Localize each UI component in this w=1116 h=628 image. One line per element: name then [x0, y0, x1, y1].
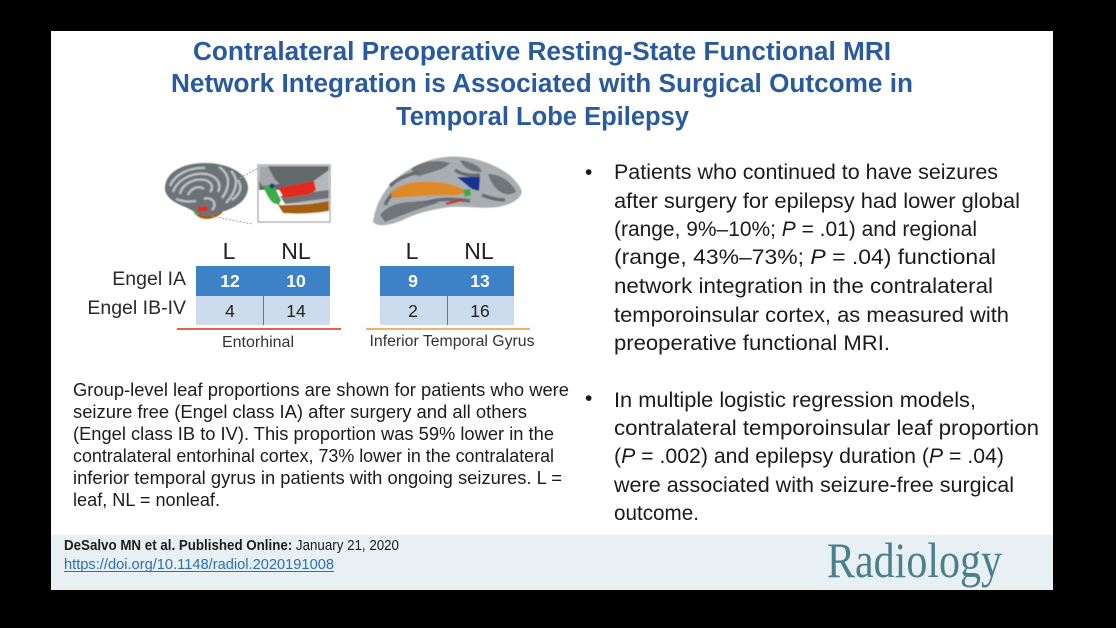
row labels: [87, 268, 186, 319]
rule: [177, 328, 341, 330]
title: Temporal Lobe Epilepsy: [396, 103, 690, 131]
column headers: NL: [464, 238, 494, 264]
logo: Radiology: Radiology: [827, 532, 1002, 588]
text block: first bullet: •: [585, 161, 592, 184]
text block: first bullet: Patients who continued to have seizures: [614, 161, 998, 184]
text block: second bullet: [585, 387, 1039, 525]
column headers: [223, 238, 311, 264]
text block: second bullet: (P = .002) and epilepsy duration (P = .04): [614, 445, 1004, 468]
title: [171, 38, 913, 131]
text block: figure caption: leaf, NL = nonleaf.: [73, 490, 220, 510]
text block: second bullet: were associated with seizure-free surgical: [613, 474, 1014, 497]
cells: [380, 266, 514, 296]
text block: figure caption: inferior temporal gyrus in patients with ongoing seizures. L =: [73, 468, 562, 488]
row labels: Engel IB-IV: [87, 297, 186, 319]
table: inferior temporal gyrus: 2: [408, 301, 418, 321]
text block: first bullet: network integration in the contralateral: [614, 275, 993, 298]
text block: first bullet: temporoinsular cortex, as measured with: [614, 304, 1009, 327]
text block: figure caption: [73, 380, 569, 510]
icon: dotted zoom connectors: [212, 168, 258, 224]
text block: figure caption: Group-level leaf proportions are shown for patients who were: [73, 380, 569, 400]
column headers: NL: [281, 238, 311, 264]
column headers: L: [406, 238, 419, 264]
text block: first bullet: [585, 161, 1020, 355]
doi link: https://doi.org/10.1148/radiol.2020191008: [64, 557, 334, 573]
text block: second bullet: contralateral temporoinsular leaf proportion: [614, 417, 1039, 440]
table: entorhinal: 12: [220, 271, 240, 291]
text block: figure caption: contralateral entorhinal cortex, 73% lower in the contralateral: [73, 446, 554, 466]
text block: first bullet: (range, 43%–73%; P = .04) functional: [614, 246, 996, 269]
text block: figure caption: (Engel class IB to IV). This proportion was 59% lower in the: [73, 424, 554, 444]
caption: Entorhinal: [222, 334, 294, 351]
title: Network Integration is Associated with Surgical Outcome in: [171, 70, 913, 98]
text block: second bullet: In multiple logistic regression models,: [614, 389, 976, 412]
panel: white slide: [51, 31, 1053, 590]
icon: medial brain surface: [165, 163, 248, 218]
rule: [366, 328, 530, 330]
table: inferior temporal gyrus: 9: [408, 271, 418, 291]
column headers: [406, 238, 494, 264]
title: Contralateral Preoperative Resting-State Functional MRI: [193, 38, 891, 66]
text block: second bullet: outcome.: [614, 502, 699, 525]
cells: [196, 266, 330, 296]
table: inferior temporal gyrus: [366, 238, 535, 350]
caption: Inferior Temporal Gyrus: [370, 333, 535, 350]
row labels: Engel IA: [112, 268, 186, 290]
text block: figure caption: seizure free (Engel class IA) after surgery and all others: [73, 402, 527, 422]
panel: footer band: [51, 535, 1053, 590]
table: inferior temporal gyrus: 13: [470, 271, 490, 291]
table: entorhinal: [87, 238, 341, 351]
table: inferior temporal gyrus: 16: [470, 301, 490, 321]
text block: first bullet: after surgery for epilepsy had lower global: [614, 190, 1020, 213]
icon: inflated brain surface: [373, 157, 522, 225]
column headers: L: [223, 238, 236, 264]
text block: first bullet: preoperative functional MRI.: [614, 332, 890, 355]
table: entorhinal: 4: [225, 301, 235, 321]
citation: DeSalvo MN et al. Published Online: January 21, 2020: [64, 538, 399, 554]
text block: first bullet: (range, 9%–10%; P = .01) and regional: [614, 218, 977, 241]
table: entorhinal: 14: [286, 301, 306, 321]
text block: second bullet: •: [585, 387, 592, 410]
icon: entorhinal inset: [258, 165, 330, 222]
table: entorhinal: 10: [286, 271, 306, 291]
